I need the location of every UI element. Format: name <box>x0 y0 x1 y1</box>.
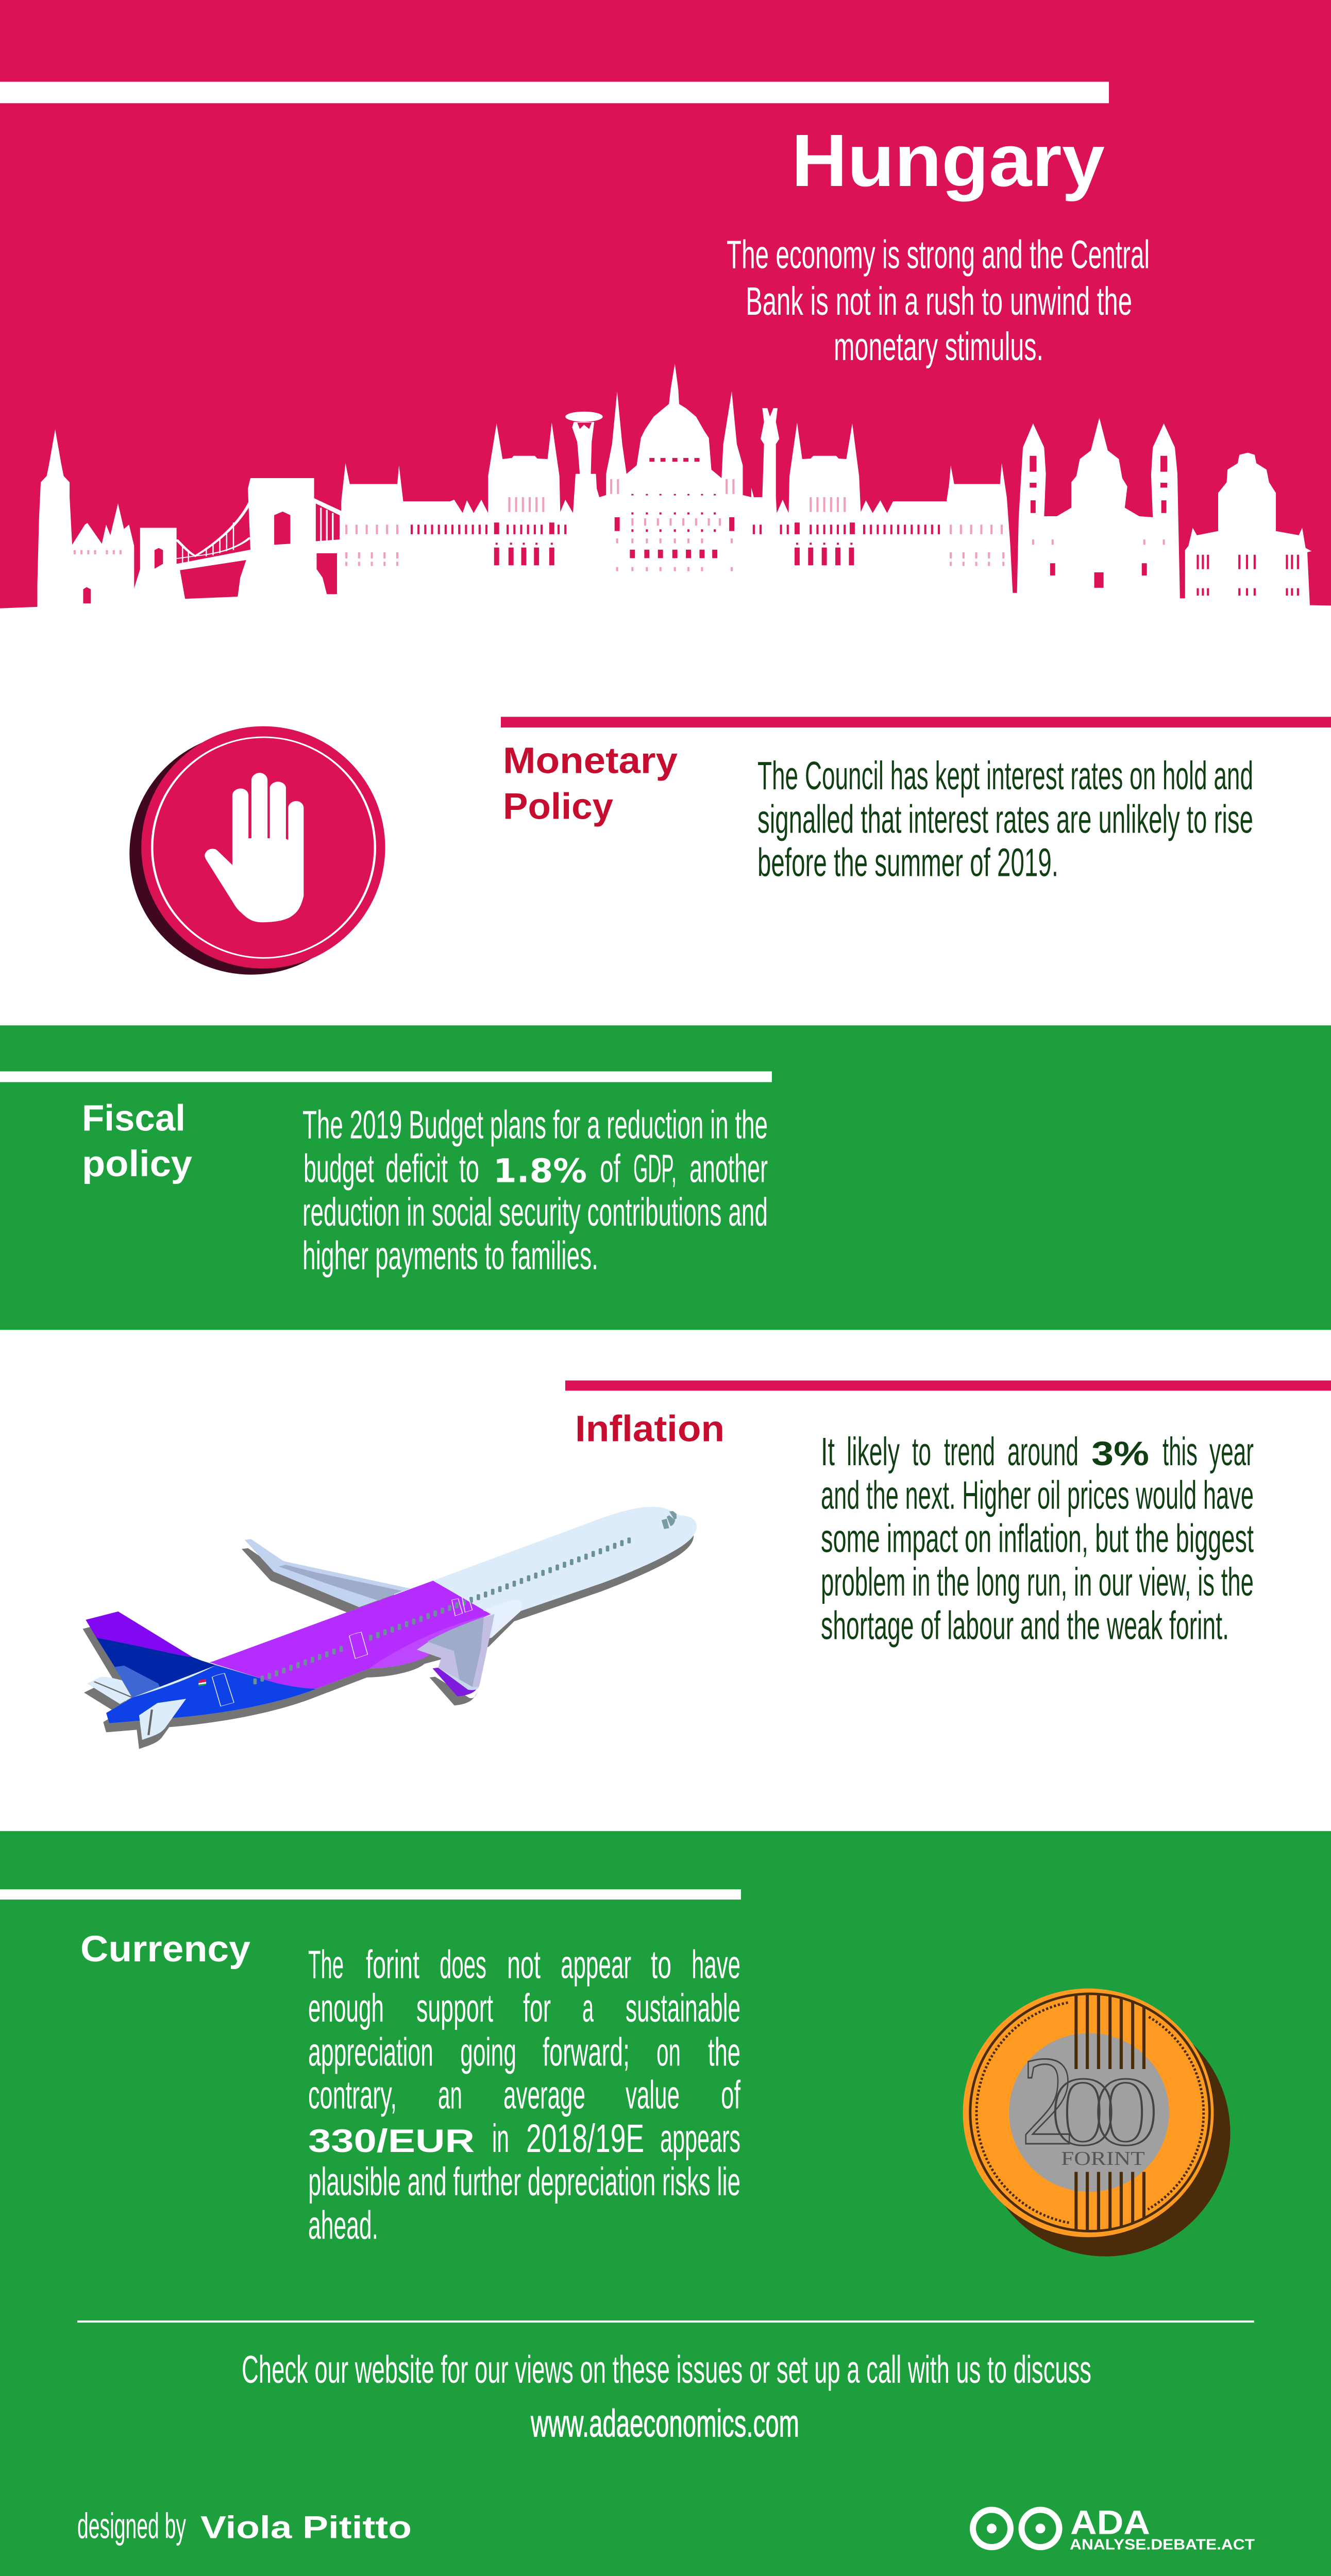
heading: monetary policy: Policy <box>503 786 613 827</box>
heading: inflation: Inflation <box>575 1409 725 1449</box>
currency text: the <box>708 2030 740 2074</box>
currency text: forint <box>366 1943 419 1987</box>
currency text: appreciation <box>308 2030 433 2074</box>
fuselage <box>106 1507 697 1723</box>
fiscal text: another <box>689 1147 768 1191</box>
coin value: 0 <box>1050 2056 1116 2166</box>
title: Hungary <box>791 119 1105 202</box>
fiscal text: The 2019 Budget plans for a reduction in the <box>302 1103 768 1147</box>
currency text: support <box>416 1986 493 2030</box>
logo: ADA <box>973 2504 1255 2553</box>
currency text: contrary, <box>308 2073 397 2117</box>
monetary text <box>757 754 1253 885</box>
coin value: 0 <box>1093 2056 1159 2166</box>
currency text: 2018/19E <box>526 2116 644 2161</box>
inflation text: 3% <box>1091 1435 1149 1472</box>
fiscal text: 1.8% <box>493 1153 587 1191</box>
fiscal text: of <box>600 1147 620 1191</box>
flag <box>198 1679 206 1686</box>
inflation rule <box>565 1380 1331 1391</box>
website: www.adaeconomics.com <box>530 2402 799 2445</box>
inflation text: to <box>912 1430 931 1474</box>
currency rule <box>0 1889 741 1900</box>
heading: currency: Currency <box>80 1928 250 1970</box>
footer rule <box>77 2320 1254 2323</box>
far wing <box>245 1539 410 1607</box>
intro text: monetary stimulus. <box>834 325 1043 369</box>
heading: fiscal policy: Fiscal <box>82 1098 186 1139</box>
credit: Viola Pititto <box>200 2510 412 2546</box>
heading: fiscal policy: policy <box>82 1143 192 1184</box>
illustration: airplane <box>83 1507 697 1749</box>
fuselage blue <box>106 1665 316 1723</box>
plane shadow <box>83 1516 694 1749</box>
fiscal text: higher payments to families. <box>302 1234 598 1278</box>
monetary text: before the summer of 2019. <box>757 841 1058 885</box>
icon: stop hand <box>129 726 385 975</box>
currency text: 330/EUR <box>308 2122 475 2159</box>
icon: 200 forint coin <box>963 1989 1231 2257</box>
currency text: an <box>438 2073 462 2117</box>
inflation text: around <box>1007 1430 1079 1474</box>
currency text: a <box>582 1986 594 2030</box>
monetary rule <box>501 717 1331 727</box>
coin value <box>1021 2030 1159 2172</box>
currency text: appears <box>660 2116 740 2161</box>
inflation text <box>821 1430 1254 1648</box>
currency text: sustainable <box>626 1986 740 2030</box>
currency text: have <box>692 1943 740 1987</box>
fiscal text: to <box>459 1147 479 1191</box>
near wing <box>417 1614 495 1689</box>
inflation text: this <box>1162 1430 1198 1474</box>
currency text: to <box>651 1943 671 1987</box>
currency text: does <box>440 1943 486 1987</box>
tailplane near <box>139 1699 186 1740</box>
winglet <box>432 1668 477 1697</box>
logo: ADA: ADA <box>1070 2504 1150 2541</box>
credit: designed by <box>77 2506 186 2546</box>
fiscal text: deficit <box>385 1147 448 1191</box>
currency text: average <box>503 2073 585 2117</box>
fiscal text: budget <box>304 1147 374 1191</box>
inflation text: year <box>1209 1430 1254 1474</box>
currency text: not <box>507 1943 541 1987</box>
currency text: enough <box>308 1986 384 2030</box>
inflation text: likely <box>847 1430 900 1474</box>
inflation text: trend <box>944 1430 995 1474</box>
logo: ADA: ANALYSE.DEBATE.ACT <box>1070 2537 1255 2553</box>
fuselage purple <box>210 1581 491 1689</box>
tailplane <box>87 1677 132 1704</box>
heading: monetary policy <box>503 740 678 827</box>
currency text: on <box>656 2030 681 2074</box>
currency text: appear <box>561 1943 631 1987</box>
coin value: 2 <box>1021 2030 1075 2172</box>
currency text: value <box>626 2073 680 2117</box>
coin label: FORINT <box>1061 2148 1145 2170</box>
currency text: forward; <box>543 2030 630 2074</box>
inflation text: It <box>821 1430 835 1474</box>
currency text: The <box>308 1943 344 1987</box>
fiscal text: GDP, <box>633 1147 677 1191</box>
currency text: for <box>523 1986 551 2030</box>
currency text: of <box>721 2073 740 2117</box>
near wing root <box>370 1614 491 1668</box>
currency text: going <box>460 2030 516 2074</box>
panel: currency and footer <box>0 1831 1331 2576</box>
tail fin <box>86 1612 193 1657</box>
cockpit <box>662 1511 677 1529</box>
intro text <box>727 233 1150 369</box>
heading: fiscal policy <box>82 1098 192 1184</box>
windows <box>75 456 1298 596</box>
panel: inflation <box>83 1380 1331 1749</box>
fiscal rule <box>0 1072 772 1082</box>
panel: monetary policy <box>129 717 1331 975</box>
panel: header <box>0 0 1331 639</box>
illustration: Budapest skyline <box>0 364 1331 639</box>
header rule <box>0 82 1109 103</box>
logo rings <box>973 2510 1059 2547</box>
currency text: in <box>492 2116 509 2161</box>
fiscal text <box>302 1103 768 1278</box>
credit <box>77 2506 412 2546</box>
currency text: ahead. <box>308 2204 378 2247</box>
currency text: plausible and further depreciation risks lie <box>308 2160 740 2204</box>
doors <box>212 1525 653 1706</box>
heading: monetary policy: Monetary <box>503 740 678 781</box>
panel: fiscal policy <box>0 1025 1331 1330</box>
currency text <box>308 1943 740 2247</box>
engine <box>483 1600 521 1638</box>
windows row <box>255 1538 629 1684</box>
fiscal text: reduction in social security contributions and <box>302 1190 768 1234</box>
